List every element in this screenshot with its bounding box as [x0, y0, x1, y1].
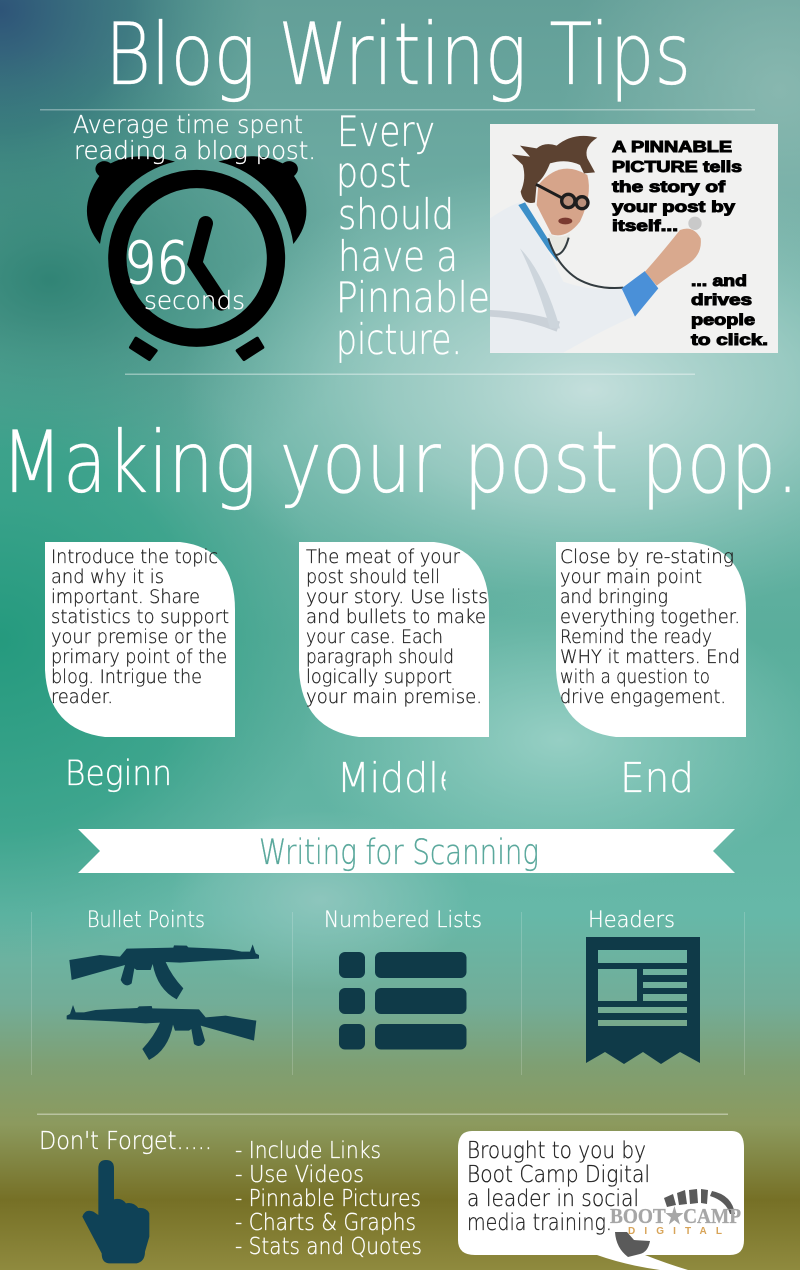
icon: alarm clock	[87, 156, 306, 359]
callout: brought to you by	[458, 1131, 744, 1270]
photo caption top: itself...	[612, 218, 678, 235]
panel: middle: your main premise.	[306, 687, 482, 708]
text: average time: Average time spent	[73, 110, 303, 139]
photo caption bottom: ... and	[691, 273, 747, 290]
list: don't forget items: - Include Links	[235, 1138, 381, 1164]
column: headers: Headers	[588, 908, 675, 933]
title: Blog Writing Tips	[105, 5, 691, 105]
text: pinnable picture statement: post	[336, 148, 411, 197]
illustration: doctor	[490, 136, 702, 353]
panel: begin	[45, 542, 235, 737]
label: middle: Middle	[337, 754, 462, 802]
panel: begin: reader.	[51, 687, 113, 708]
panel: middle: The meat of your	[306, 547, 460, 568]
list: don't forget items: - Stats and Quotes	[235, 1234, 422, 1260]
column: bullet points	[67, 908, 259, 1060]
text: average time: reading a blog post.	[74, 136, 316, 165]
panel: middle: and bullets to make	[306, 607, 486, 628]
stat: 96 seconds: 96	[124, 229, 189, 297]
text: pinnable picture statement: picture.	[336, 315, 462, 364]
panel: begin: blog. Intrigue the	[51, 667, 202, 688]
panel: middle	[299, 542, 489, 737]
photo caption top: A PINNABLE	[612, 139, 732, 156]
stat: 96 seconds	[124, 229, 245, 315]
ribbon: writing for scanning	[78, 829, 735, 873]
panel: end: everything together.	[560, 607, 740, 628]
panel: end	[556, 542, 746, 737]
list: don't forget items	[235, 1138, 422, 1260]
icon: pointing hand	[82, 1160, 149, 1263]
column dividers	[31, 912, 745, 1075]
text: pinnable picture statement	[336, 107, 490, 364]
column: numbered lists: Numbered Lists	[324, 908, 482, 933]
list: don't forget items: - Pinnable Pictures	[235, 1186, 421, 1212]
column: bullet points: Bullet Points	[87, 908, 205, 933]
list: don't forget items: - Use Videos	[235, 1162, 364, 1188]
text: pinnable picture statement: have a	[338, 232, 458, 281]
callout: brought to you by: a leader in social	[467, 1186, 639, 1212]
photo caption bottom	[691, 273, 768, 349]
icon: rifles	[67, 944, 259, 1060]
panel: middle: post should tell	[306, 567, 440, 588]
column: numbered lists	[324, 908, 482, 1050]
stat: 96 seconds: seconds	[144, 286, 245, 315]
icon: newspaper	[586, 937, 700, 1064]
callout: brought to you by: Boot Camp Digital	[467, 1162, 650, 1188]
photo caption bottom: to click.	[691, 332, 768, 349]
photo caption top: the story of	[612, 179, 726, 196]
photo caption top: your post by	[612, 199, 735, 216]
heading: don't forget: Don't Forget.....	[39, 1126, 212, 1155]
text: pinnable picture statement: Every	[337, 107, 435, 156]
panel: end: your main point	[560, 567, 702, 588]
panel: middle: logically support	[306, 667, 452, 688]
label: begin: Beginn	[65, 754, 172, 794]
photo caption top: PICTURE tells	[612, 159, 742, 176]
panel: end: drive engagement.	[560, 687, 726, 708]
label: end: End	[620, 754, 694, 802]
panel: end: and bringing	[560, 587, 668, 608]
logo: boot camp digital	[610, 1189, 741, 1257]
text: average time	[73, 110, 316, 165]
panel: begin: your premise or the	[51, 627, 227, 648]
divider bottom	[37, 1114, 728, 1115]
divider top	[40, 109, 755, 110]
panel: end: with a question to	[560, 667, 710, 688]
panel: begin: primary point of the	[51, 647, 227, 668]
photo: pinnable picture	[490, 124, 778, 353]
boot print	[615, 1189, 735, 1257]
divider middle	[125, 374, 695, 375]
photo caption bottom: drives	[691, 292, 752, 309]
photo caption top	[612, 139, 742, 235]
text: pinnable picture statement: Pinnable	[336, 273, 490, 322]
text: pinnable picture statement: should	[338, 190, 454, 239]
callout: brought to you by: media training.	[467, 1210, 612, 1236]
logo: boot camp digital: DIGITAL	[628, 1226, 722, 1237]
panel: begin: and why it is	[51, 567, 164, 588]
panel: begin: Introduce the topic	[51, 547, 218, 568]
list: don't forget items: - Charts & Graphs	[235, 1210, 416, 1236]
ribbon: writing for scanning: Writing for Scanning	[259, 833, 539, 873]
icon: list	[339, 952, 466, 1050]
panel: end: WHY it matters. End	[560, 647, 740, 668]
panel: begin: statistics to support	[51, 607, 229, 628]
panel: begin: important. Share	[51, 587, 200, 608]
panel: middle: paragraph should	[306, 647, 454, 668]
panel: end: Close by re-stating	[560, 547, 734, 568]
logo: boot camp digital: BOOT★CAMP	[610, 1204, 741, 1228]
photo caption bottom: people	[691, 312, 755, 329]
callout: brought to you by: Brought to you by	[467, 1138, 646, 1164]
panel: middle: your case. Each	[306, 627, 443, 648]
panel: end: Remind the ready	[560, 627, 712, 648]
panel: middle: your story. Use lists	[306, 587, 488, 608]
column: headers	[586, 908, 700, 1064]
